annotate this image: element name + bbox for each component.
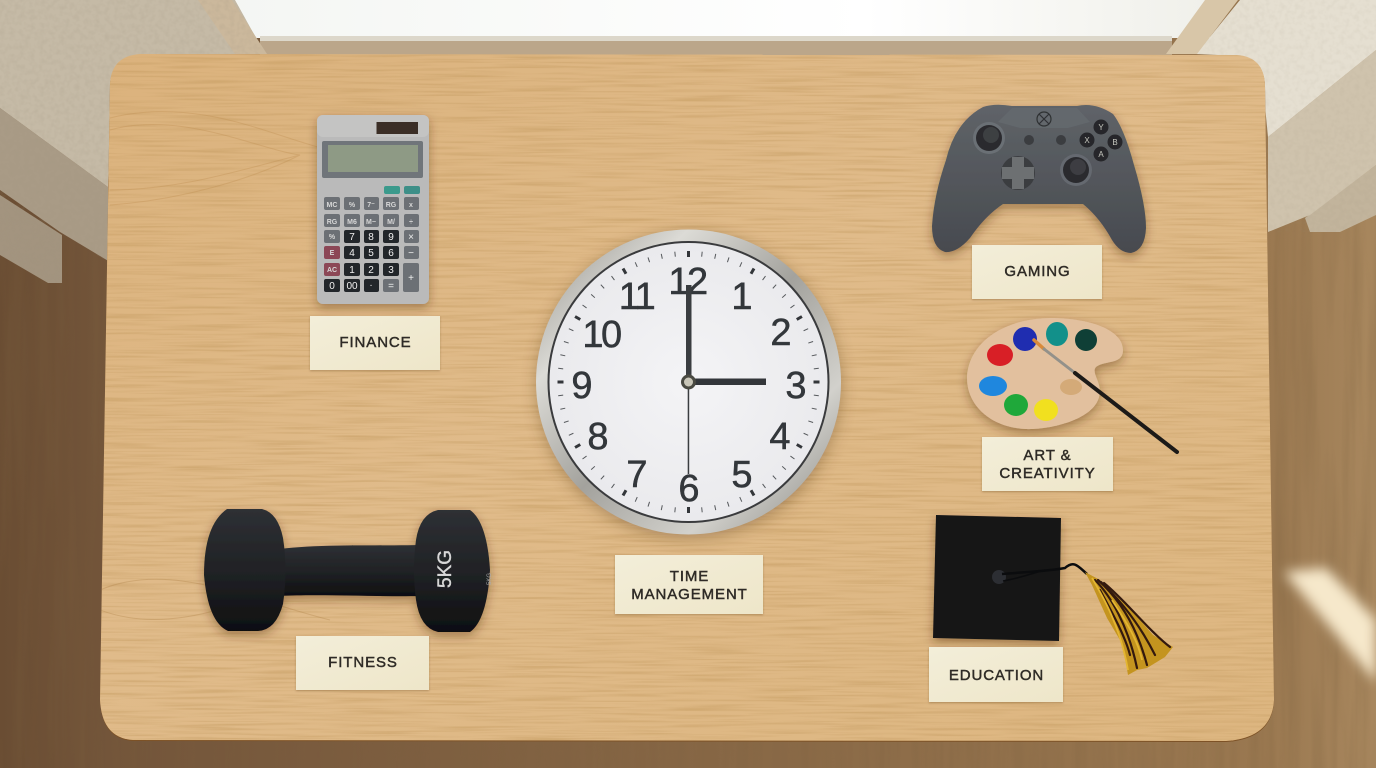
clock numerals: 8	[587, 416, 609, 458]
curtain left	[0, 0, 280, 290]
calculator number keys: 7	[349, 232, 355, 243]
clock numerals: 7	[626, 454, 648, 496]
calculator function keys: M6	[347, 219, 357, 226]
clock numerals: 3	[785, 365, 807, 407]
face buttons	[1080, 120, 1122, 162]
label: time management	[615, 555, 763, 614]
calculator number keys: E	[330, 250, 335, 257]
right thumbstick	[1060, 154, 1092, 186]
label: art and creativity: CREATIVITY	[999, 465, 1096, 482]
calculator number keys: 4	[349, 248, 355, 259]
sunlight patch on floor	[1284, 568, 1376, 682]
dumbbell	[204, 509, 493, 632]
clock numerals: 12	[668, 261, 707, 303]
calculator function keys: M−	[366, 219, 376, 226]
calculator function keys: MC	[327, 202, 337, 209]
game controller	[932, 105, 1146, 253]
calculator number keys: %	[329, 234, 336, 241]
clock hands	[681, 285, 766, 474]
clock numerals: 4	[769, 416, 791, 458]
label: education: EDUCATION	[949, 667, 1044, 684]
clock numerals: 6	[678, 468, 700, 510]
clock numerals	[571, 261, 807, 510]
label: finance: FINANCE	[339, 334, 412, 351]
table top	[90, 50, 1290, 745]
calculator number keys: 2	[368, 265, 374, 276]
label: gaming: GAMING	[1004, 263, 1071, 280]
game controller: B	[1112, 138, 1118, 147]
xbox logo	[1037, 112, 1051, 126]
calculator number keys	[324, 230, 414, 292]
calculator number keys: 5	[368, 248, 374, 259]
clock numerals: 9	[571, 365, 593, 407]
calculator number keys: 8	[368, 232, 374, 243]
calculator number keys: 0	[329, 281, 335, 292]
calculator number keys: =	[388, 281, 394, 292]
window	[225, 0, 1210, 55]
label: finance	[310, 316, 440, 370]
d-pad	[1001, 156, 1035, 190]
calculator function keys: RG	[386, 202, 397, 209]
game controller: X	[1084, 136, 1090, 145]
calculator	[317, 115, 429, 304]
calculator number keys: −	[408, 248, 414, 259]
paint palette	[967, 318, 1177, 452]
label: fitness: FITNESS	[328, 654, 398, 671]
solar panel	[376, 122, 418, 134]
clock rim	[536, 230, 841, 534]
calculator number keys: 00	[346, 281, 358, 292]
display	[322, 141, 423, 178]
label: fitness	[296, 636, 429, 690]
weight text: 5KG	[435, 550, 456, 588]
clock numerals: 11	[619, 276, 655, 318]
label: art and creativity	[982, 437, 1113, 491]
clock numerals: 2	[770, 312, 792, 354]
calculator function keys: M/	[387, 219, 395, 226]
calculator function keys	[324, 186, 420, 292]
calculator function keys: %	[349, 202, 356, 209]
calculator number keys: 1	[349, 265, 355, 276]
game controller: A	[1098, 150, 1104, 159]
left thumbstick	[973, 122, 1005, 154]
curtain right	[1160, 0, 1376, 240]
calculator function keys: 7⁻	[367, 202, 375, 209]
clock numerals: 5	[731, 454, 753, 496]
calculator number keys: 6	[388, 248, 394, 259]
calculator function keys: x	[409, 202, 413, 209]
game controller: Y	[1098, 123, 1104, 132]
cap button and cord	[992, 564, 1087, 584]
clock face	[550, 243, 828, 521]
label: time management: TIME	[670, 568, 709, 585]
graduation cap	[933, 515, 1173, 675]
paint brush	[1034, 340, 1177, 452]
calculator number keys: +	[408, 273, 414, 284]
calculator number keys: ·	[369, 280, 373, 291]
label: gaming	[972, 245, 1102, 299]
tassel	[1085, 572, 1173, 675]
label: education	[929, 647, 1063, 702]
calculator function keys: RG	[327, 219, 338, 226]
calculator function keys: ÷	[409, 219, 413, 226]
paints	[979, 322, 1097, 421]
small buttons	[1024, 135, 1066, 145]
calculator number keys: AC	[327, 267, 337, 274]
wall clock	[536, 230, 841, 538]
dumbbell: 5KG	[487, 573, 493, 585]
clock numerals: 10	[582, 314, 621, 356]
calculator number keys: 3	[388, 265, 394, 276]
clock numerals: 1	[731, 276, 753, 318]
minute ticks	[558, 251, 820, 513]
calculator number keys: ×	[408, 232, 414, 243]
label: art and creativity: ART &	[1023, 447, 1072, 464]
label: time management: MANAGEMENT	[631, 586, 748, 603]
calculator number keys: 9	[388, 232, 394, 243]
